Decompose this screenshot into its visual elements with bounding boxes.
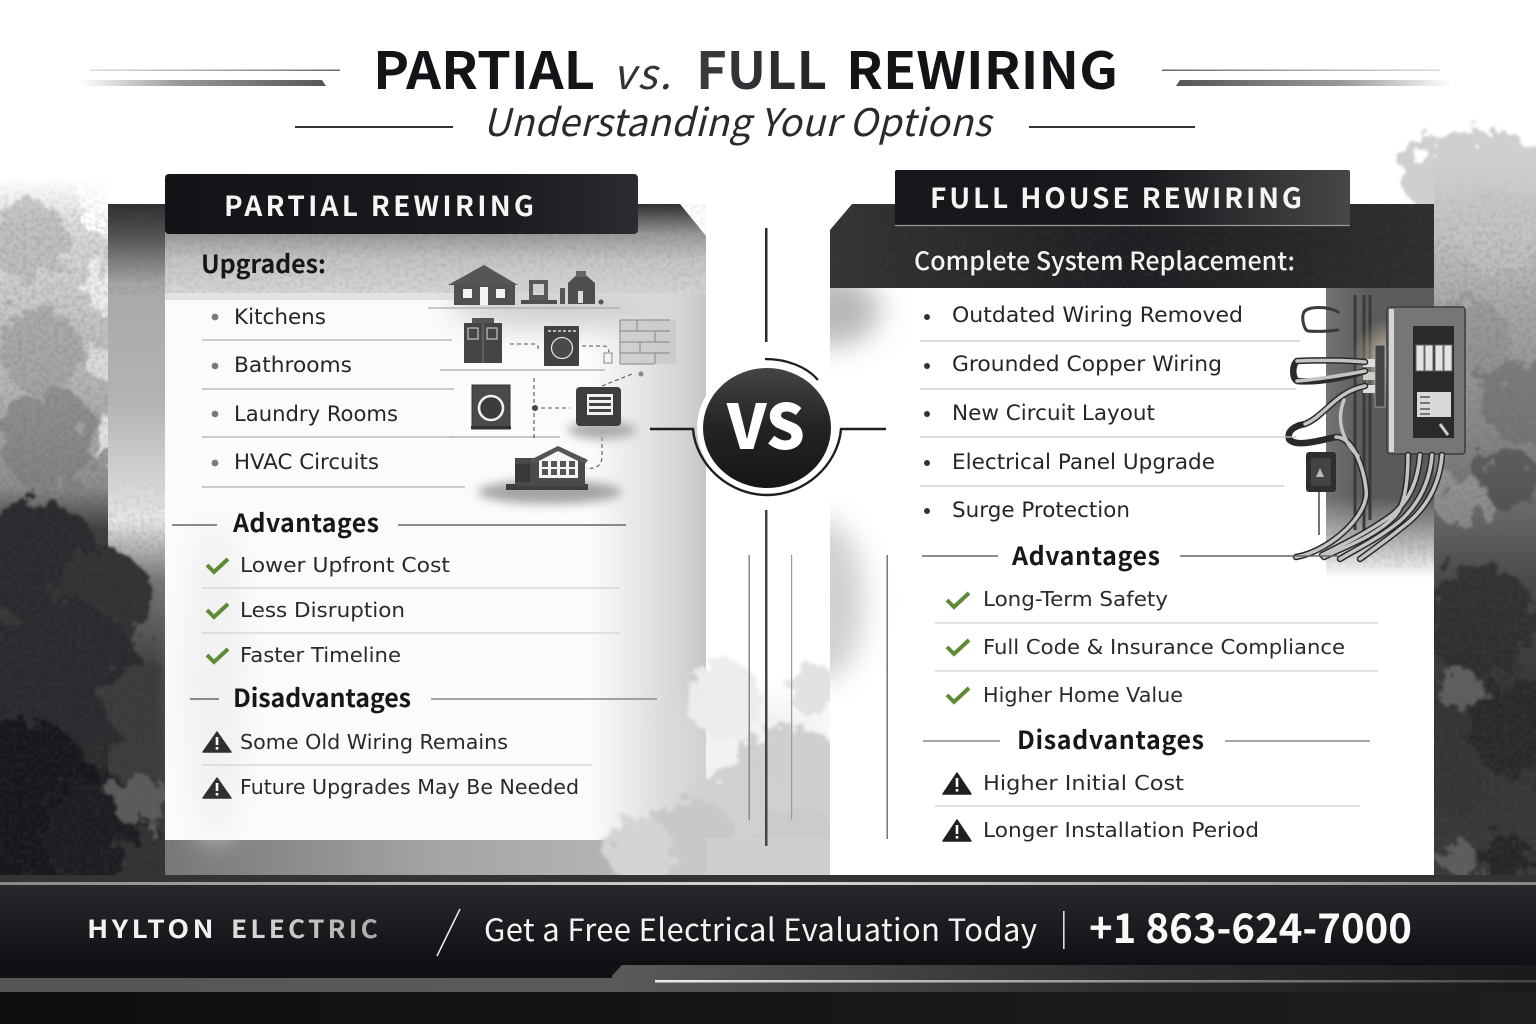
icon: check marks bbox=[947, 593, 969, 702]
upgrades list: Grounded Copper Wiring bbox=[952, 352, 1222, 376]
center divider lines bbox=[748, 228, 888, 846]
background: misty forest bbox=[0, 120, 1536, 875]
icon: brick wall bbox=[620, 320, 676, 364]
panel header bar: PARTIAL REWIRING bbox=[224, 185, 534, 225]
upgrades heading: Upgrades: bbox=[201, 245, 326, 281]
right title rules bbox=[1162, 70, 1452, 86]
left panel backing bbox=[0, 204, 706, 890]
panel header bar: FULL HOUSE REWIRING bbox=[930, 177, 1302, 217]
disadvantages heading: Disadvantages bbox=[233, 679, 411, 715]
brand name bbox=[87, 910, 381, 946]
advantages list bbox=[935, 587, 1378, 707]
icon: small heater bbox=[604, 353, 612, 363]
junction block bbox=[1363, 345, 1385, 407]
advantages list: Faster Timeline bbox=[240, 643, 401, 667]
main title: vs. bbox=[613, 41, 671, 102]
call to action: Get a Free Electrical Evaluation Today bbox=[484, 905, 1037, 950]
upgrades list bbox=[202, 305, 465, 487]
advantages list: Less Disruption bbox=[240, 598, 405, 622]
icon: warning triangles bbox=[943, 773, 971, 841]
icon group: home upgrade diagram bbox=[428, 265, 676, 504]
icon: water heater bbox=[560, 271, 604, 304]
advantages list: Lower Upfront Cost bbox=[240, 553, 450, 577]
icon: washer top bbox=[544, 326, 579, 366]
icon: cabinet bbox=[464, 318, 502, 363]
outlet box bbox=[1306, 452, 1336, 535]
disadvantages list: Higher Initial Cost bbox=[983, 771, 1184, 795]
disadvantages list bbox=[935, 771, 1360, 842]
VS badge: VS bbox=[726, 377, 805, 467]
VS badge bbox=[650, 359, 886, 495]
footer band bbox=[0, 875, 1536, 1024]
disadvantages list: Future Upgrades May Be Needed bbox=[240, 775, 579, 799]
title block bbox=[80, 30, 1452, 147]
main title bbox=[373, 30, 1118, 104]
left forest backdrop bbox=[0, 184, 108, 875]
advantages heading: Advantages bbox=[1011, 537, 1160, 573]
disadvantages list bbox=[202, 730, 592, 799]
upgrades list: Electrical Panel Upgrade bbox=[952, 450, 1215, 474]
advantages list: Higher Home Value bbox=[983, 683, 1183, 707]
right panel backing bbox=[830, 204, 1434, 688]
upgrades list: Outdated Wiring Removed bbox=[952, 303, 1243, 327]
upgrades list: Kitchens bbox=[234, 305, 326, 329]
breaker box bbox=[1387, 307, 1465, 454]
complete system heading: Complete System Replacement: bbox=[914, 242, 1295, 278]
upgrades list: Laundry Rooms bbox=[234, 402, 398, 426]
wire bundles bbox=[1289, 308, 1442, 559]
upgrades list: Surge Protection bbox=[952, 498, 1130, 522]
main title: PARTIAL bbox=[373, 30, 595, 104]
subtitle: Understanding Your Options bbox=[483, 92, 994, 147]
main title: REWIRING bbox=[846, 30, 1118, 104]
advantages list: Long-Term Safety bbox=[983, 587, 1168, 611]
upgrades list: HVAC Circuits bbox=[234, 450, 379, 474]
upgrades list: New Circuit Layout bbox=[952, 401, 1155, 425]
disadvantages list: Some Old Wiring Remains bbox=[240, 730, 508, 754]
panel header bar bbox=[165, 174, 638, 234]
panel header bar bbox=[895, 170, 1350, 226]
advantages list bbox=[202, 553, 620, 667]
right forest backdrop bbox=[1402, 132, 1536, 884]
advantages heading: Advantages bbox=[232, 504, 379, 540]
phone number: +1 863-624-7000 bbox=[1089, 895, 1412, 955]
advantages list: Full Code & Insurance Compliance bbox=[983, 635, 1345, 659]
slash divider bbox=[437, 909, 460, 956]
panel: full house rewiring bbox=[830, 170, 1466, 842]
disadvantages heading: Disadvantages bbox=[1017, 721, 1204, 757]
disadvantages list: Longer Installation Period bbox=[983, 818, 1259, 842]
vertical divider bbox=[1063, 911, 1065, 949]
panel: partial rewiring bbox=[0, 174, 854, 910]
icon: electrical panel and wires bbox=[1289, 288, 1465, 578]
icon: small house bbox=[478, 446, 622, 504]
white sheet bbox=[165, 281, 854, 910]
brand name: HYLTON bbox=[87, 910, 217, 946]
icon: desk bbox=[521, 280, 557, 304]
upgrades list: Bathrooms bbox=[234, 353, 352, 377]
main title: FULL bbox=[696, 30, 827, 104]
icon: washing machine bbox=[471, 385, 511, 429]
icon: warning triangles bbox=[203, 732, 231, 798]
icon: check marks bbox=[207, 559, 228, 662]
icon: house bbox=[448, 265, 518, 305]
upgrades list bbox=[920, 303, 1300, 522]
center strip mist bbox=[706, 204, 830, 876]
icon: HVAC unit bbox=[532, 372, 644, 439]
arrows between appliances bbox=[510, 344, 632, 468]
left title rules bbox=[80, 70, 340, 86]
brand name: ELECTRIC bbox=[231, 910, 381, 946]
